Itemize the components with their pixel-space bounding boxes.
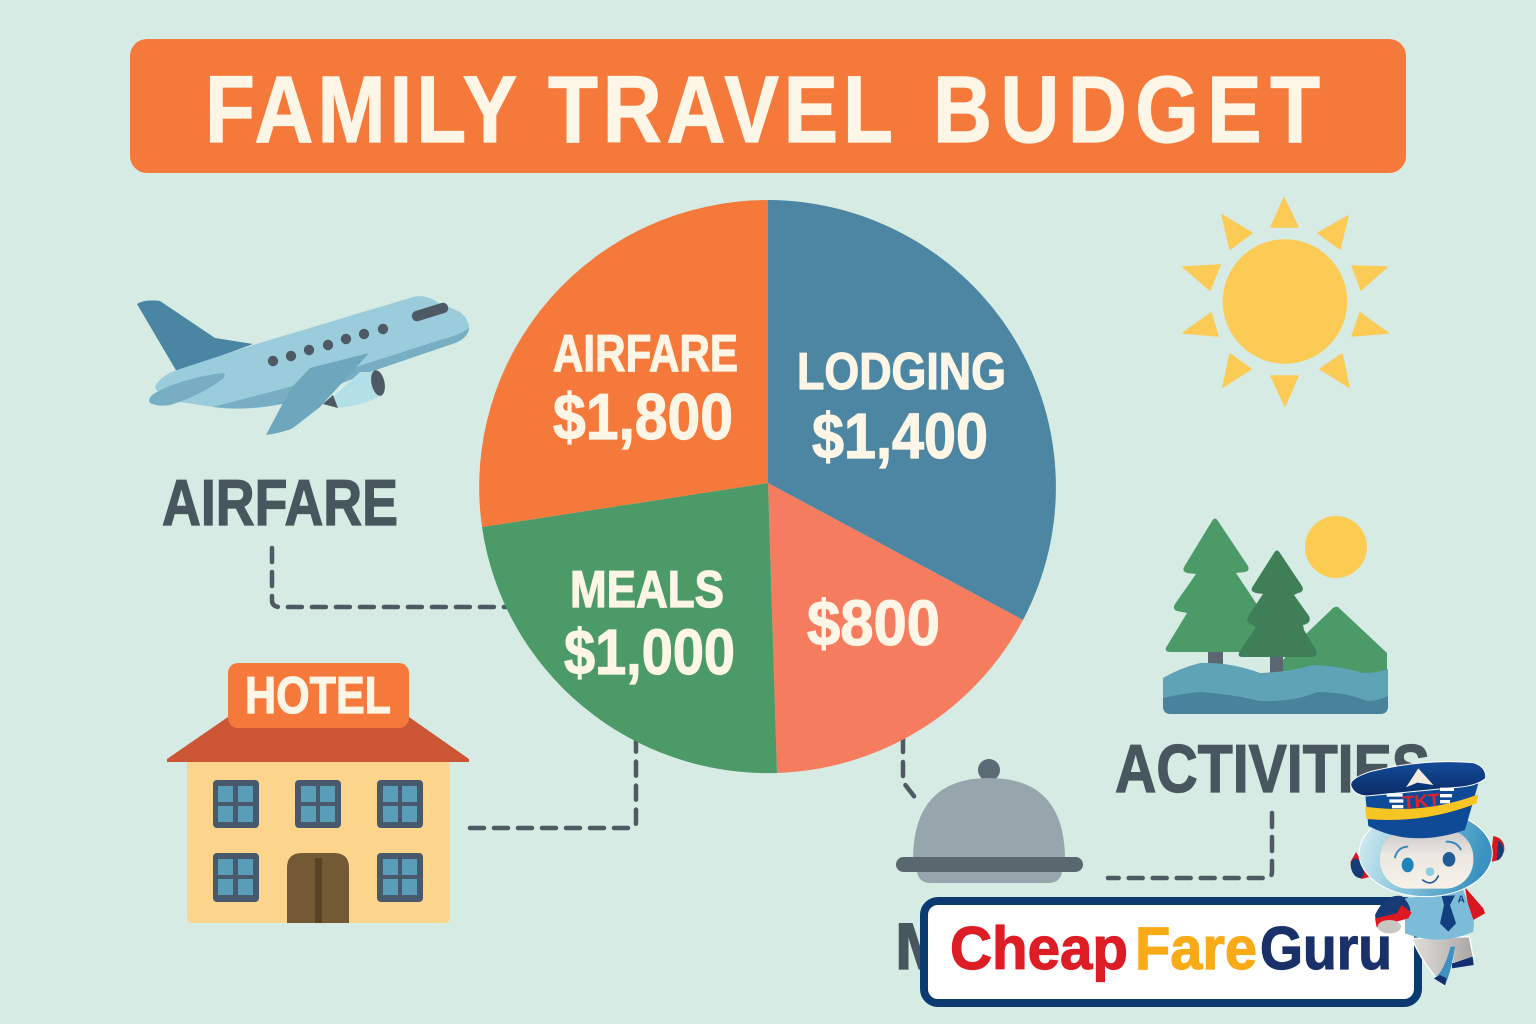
icon: airplane [137, 296, 469, 435]
mascot body [1405, 890, 1474, 940]
dashed connector: hotel [470, 738, 636, 828]
title banner: TRAVEL [548, 56, 893, 162]
mascot hat: TKT [1402, 790, 1441, 813]
label: lodging amount [797, 343, 1006, 472]
label: meals (partly covered): MEALS [895, 909, 1126, 983]
label: airfare: AIRFARE [162, 466, 398, 539]
hotel windows [213, 780, 423, 902]
mascot front arm [1375, 896, 1412, 933]
label: airfare amount: $1,800 [553, 380, 733, 453]
label: activities: ACTIVITIES [1115, 731, 1430, 807]
title banner [130, 39, 1406, 173]
airplane windows [268, 324, 388, 366]
label: meals amount: MEALS [570, 561, 724, 619]
slice: coral $800 [768, 483, 1023, 773]
hotel door [287, 853, 349, 923]
slice: meals [482, 483, 777, 773]
label: $800: $800 [807, 587, 940, 659]
dashed connector: meals [903, 738, 917, 800]
slice: airfare [479, 200, 768, 527]
mascot hat [1351, 762, 1486, 838]
mascot back arm [1465, 887, 1485, 920]
label: airfare amount [553, 325, 738, 453]
logo: CheapFareGuru [924, 901, 1418, 1003]
slice: lodging [768, 200, 1056, 620]
pie chart [479, 200, 1056, 773]
label: lodging amount: $1,400 [812, 400, 988, 472]
icon: meal cloche [896, 759, 1083, 883]
mascot legs [1412, 937, 1474, 985]
label: meals amount: $1,000 [564, 616, 735, 688]
label: meals amount [564, 561, 735, 688]
mascot ears [1348, 836, 1504, 880]
mascot helmet and face [1359, 810, 1492, 897]
icon: hotel [167, 663, 469, 923]
title banner: BUDGET [933, 56, 1320, 162]
mascot body: A [1458, 895, 1465, 906]
logo: CheapFareGuru: Guru [1260, 915, 1392, 982]
logo: CheapFareGuru: Cheap [950, 915, 1128, 982]
label: lodging amount: LODGING [797, 343, 1006, 401]
mascot: pilot character [1348, 762, 1504, 985]
dashed connector: airfare [272, 548, 506, 607]
label: airfare amount: AIRFARE [553, 325, 738, 383]
logo: CheapFareGuru: Fare [1135, 915, 1257, 982]
title banner: FAMILY [205, 56, 517, 162]
hotel sign: HOTEL [245, 667, 391, 725]
icon: activities landscape [1163, 516, 1388, 714]
dashed connector: activities [1108, 813, 1272, 878]
icon: sun [1183, 198, 1388, 406]
